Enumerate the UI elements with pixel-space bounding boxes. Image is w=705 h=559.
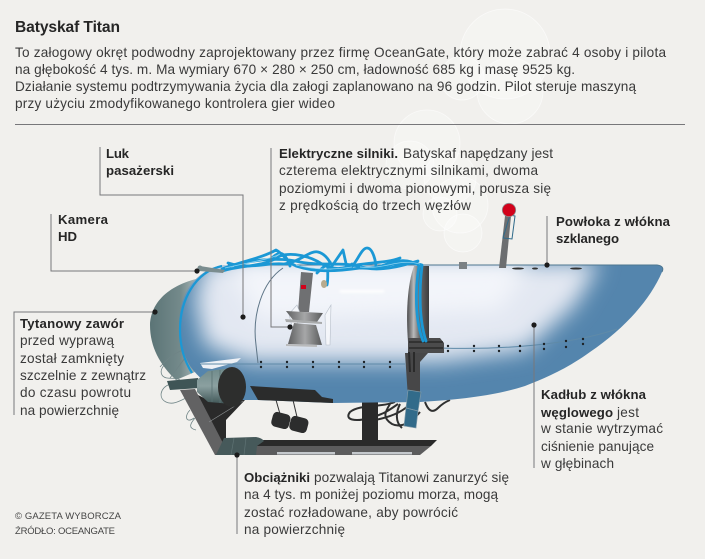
label: Obciazniki: na 4 tys. m poniżej poziomu morza, mogą [244,487,498,502]
label: Powloka z wlokna szklanego: szklanego [556,231,619,246]
label: Obciazniki [234,452,509,537]
front thruster [167,367,246,407]
rear column [362,400,378,442]
intro text: przy użyciu zmodyfikowanego kontrolera gier wideo [15,96,335,111]
submersible [150,203,663,455]
label: Kadlub z wlokna weglowego: Kadłub z włókna [541,387,647,402]
intro text: To załogowy okręt podwodny zaprojektowany przez firmę OceanGate, który może zabrać 4 osoby i pilota [15,45,666,60]
hull [179,262,663,403]
label: Obciazniki: zostać rozładowane, aby powrócić [244,505,458,520]
label: Tytanowy zawor: został zamknięty [20,351,124,366]
label: Kadlub z wlokna weglowego: jest [616,405,639,420]
label: Kadlub z wlokna weglowego [531,322,663,471]
label: Kadlub z wlokna weglowego: węglowego [540,405,613,420]
label: Elektryczne silniki: Elektryczne silniki. [279,146,398,161]
hull blue edge [180,266,222,373]
label: Kamera HD: HD [58,229,77,244]
cables under hull [348,400,450,428]
label: Tytanowy zawor: szczelnie z zewnątrz [20,368,146,383]
label: Elektryczne silniki [271,146,553,330]
cables left of dome [161,352,196,430]
label: Luk pasazerski [100,146,246,320]
intro text: Działanie systemu podtrzymywania życia dla załogi zaplanowano na 96 godzin. Pilot steruje maszyną [15,79,636,94]
label: Obciazniki: pozwalają Titanowi zanurzyć się [314,470,509,485]
credits: © GAZETA WYBORCZA [15,511,122,522]
label: Kadlub z wlokna weglowego: w głębinach [540,456,614,471]
camera [198,266,225,273]
dome lines [160,350,185,378]
label: Tytanowy zawor: do czasu powrotu [20,385,131,400]
label: Elektryczne silniki: czterema elektrycznymi silnikami, dwoma [279,163,538,178]
intro text: na głębokość 4 tys. m. Ma wymiary 670 × 280 × 250 cm, ładowność 685 kg i masę 9525 kg. [15,62,575,77]
periscope [499,203,516,268]
front frame [180,389,245,455]
keel strip [250,386,333,403]
bubbles [386,9,550,252]
label: Luk pasazerski: Luk [106,146,130,161]
label: Powloka z wlokna szklanego [544,214,671,268]
hatch line [255,268,283,363]
label: Elektryczne silniki: Batyskaf napędzany jest [403,146,553,161]
blue cables [222,248,422,288]
label: Kamera HD [51,212,200,274]
label: Powloka z wlokna szklanego: Powłoka z włókna [556,214,671,229]
title: Batyskaf Titan [15,19,120,36]
label: Kadlub z wlokna weglowego: ciśnienie panujące [541,439,654,454]
credits [15,511,122,537]
thruster [285,272,331,347]
label: Elektryczne silniki: poziomymi i dwoma pionowymi, porusza się [279,181,551,196]
intro text [15,45,666,111]
weights [270,400,310,434]
label: Kamera HD: Kamera [58,212,109,227]
label: Tytanowy zawor: na powierzchnię [20,403,119,418]
label: Elektryczne silniki: z prędkością do trzech węzłów [279,198,471,213]
seams and rivets [200,329,617,368]
credits: ŹRÓDŁO: OCEANGATE [15,526,115,537]
collar cable [416,266,426,341]
label: Tytanowy zawor: przed wyprawą [20,333,114,348]
label: Obciazniki: na powierzchnię [244,522,345,537]
label: Tytanowy zawor: Tytanowy zawór [20,316,124,331]
top fittings [459,262,582,270]
dome [150,277,205,380]
label: Obciazniki: Obciążniki [244,470,310,485]
label: Luk pasazerski: pasażerski [106,163,174,178]
divider [15,124,685,126]
label: Kadlub z wlokna weglowego: w stanie wytrzymać [540,421,663,436]
skid [215,437,437,455]
label: Tytanowy zawor [14,309,158,418]
collar ring [404,266,444,428]
